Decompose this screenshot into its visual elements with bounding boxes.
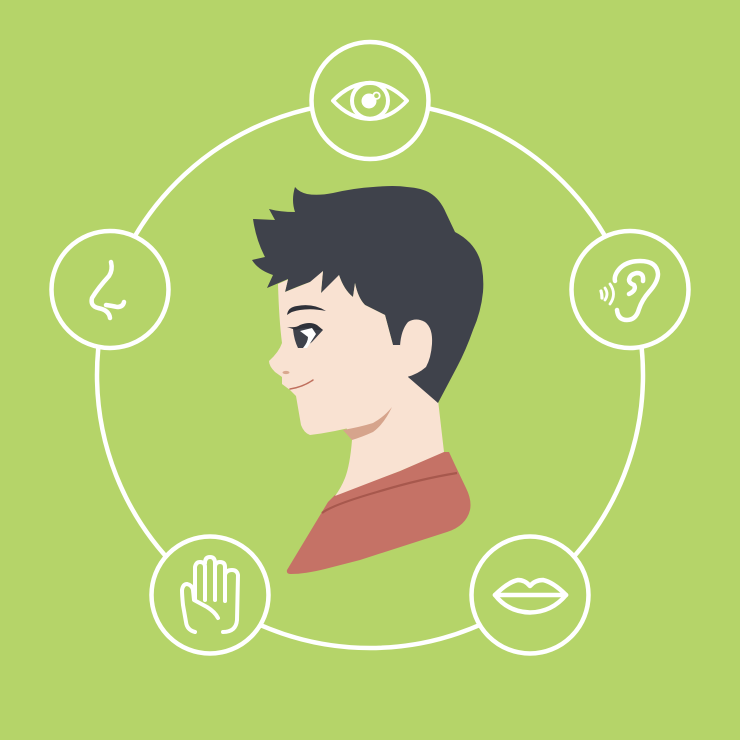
connecting ring xyxy=(97,102,643,648)
sense: hearing xyxy=(572,231,688,348)
sense: taste xyxy=(472,536,588,654)
icon: eye xyxy=(333,83,407,119)
touch circle xyxy=(152,536,268,654)
sense: sight xyxy=(312,42,428,159)
chin shadow xyxy=(343,407,392,440)
sight circle xyxy=(312,42,428,159)
nostril xyxy=(282,371,290,374)
hair xyxy=(252,186,483,403)
sense: smell xyxy=(52,231,168,348)
face xyxy=(269,271,408,435)
eye iris xyxy=(293,325,323,348)
person profile xyxy=(252,186,483,574)
icon: lips xyxy=(495,580,566,612)
eye xyxy=(287,323,323,348)
eye white xyxy=(300,328,316,348)
shirt xyxy=(287,452,470,574)
icon: ear xyxy=(601,261,658,320)
mouth xyxy=(290,380,313,389)
icon: hand xyxy=(182,557,238,632)
eyebrow xyxy=(287,305,326,315)
shirt collar line xyxy=(322,473,457,513)
taste circle xyxy=(472,536,588,654)
sense: touch xyxy=(152,536,268,654)
neck xyxy=(335,372,444,496)
hearing circle xyxy=(572,231,688,348)
eye upper lash xyxy=(287,323,323,330)
smell circle xyxy=(52,231,168,348)
ear xyxy=(400,320,432,377)
icon: nose xyxy=(92,262,124,318)
